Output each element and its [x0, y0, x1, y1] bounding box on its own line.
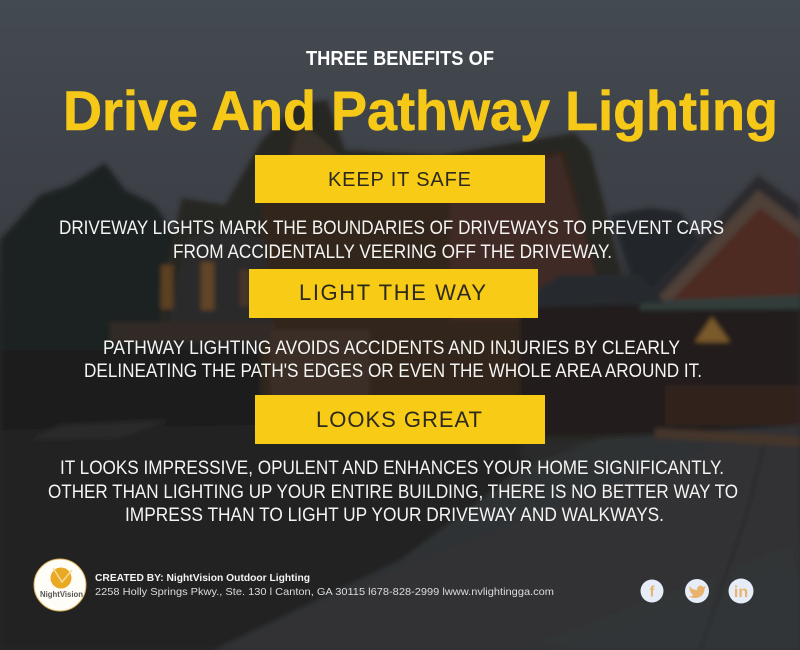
panel: looks great: [48, 395, 738, 526]
text: looks great description: IT LOOKS IMPRESSIVE, OPULENT AND ENHANCES YOUR HOME SIGNIFICANTLY.: [60, 458, 724, 479]
banner: looks great: LOOKS GREAT: [316, 407, 482, 432]
text: keep it safe description: DRIVEWAY LIGHTS MARK THE BOUNDARIES OF DRIVEWAYS TO PREVENT CARS: [59, 218, 724, 239]
icon: facebook: [640, 580, 664, 602]
panel: keep it safe: [59, 155, 724, 263]
banner: light the way: [249, 269, 538, 318]
banner: light the way: LIGHT THE WAY: [299, 280, 486, 305]
text: light the way description: DELINEATING THE PATH'S EDGES OR EVEN THE WHOLE AREA AROUND IT.: [84, 361, 702, 382]
icon: linkedin: [728, 578, 754, 604]
icon: NightVision logo: [34, 559, 86, 611]
main heading: Drive And Pathway Lighting: [63, 79, 778, 142]
title: [63, 48, 778, 142]
text: light the way description: PATHWAY LIGHTING AVOIDS ACCIDENTS AND INJURIES BY CLEARLY: [103, 338, 680, 359]
icon: twitter: [685, 579, 709, 603]
text: light the way description: [84, 338, 702, 382]
footer credits: CREATED BY: NightVision Outdoor Lighting: [95, 572, 310, 584]
text: looks great description: [48, 458, 738, 526]
footer credits: 2258 Holly Springs Pkwy., Ste. 130 l Canton, GA 30115 l678-828-2999 lwww.nvlightingga.com: [95, 586, 554, 598]
footer credits: [95, 572, 554, 598]
panel: light the way: [84, 269, 702, 382]
icon: NightVision logo: NightVision: [40, 590, 83, 599]
subtitle: three benefits of: THREE BENEFITS OF: [306, 48, 494, 70]
text: keep it safe description: FROM ACCIDENTALLY VEERING OFF THE DRIVEWAY.: [173, 242, 612, 263]
text: looks great description: IMPRESS THAN TO LIGHT UP YOUR DRIVEWAY AND WALKWAYS.: [125, 505, 664, 526]
text: looks great description: OTHER THAN LIGHTING UP YOUR ENTIRE BUILDING, THERE IS NO BETTER WAY TO: [48, 482, 738, 503]
banner: keep it safe: [255, 155, 545, 203]
icon: facebook: f: [650, 584, 656, 600]
banner: keep it safe: KEEP IT SAFE: [328, 169, 471, 191]
text: keep it safe description: [59, 218, 724, 263]
icon: linkedin: in: [734, 584, 748, 601]
banner: looks great: [255, 395, 545, 444]
